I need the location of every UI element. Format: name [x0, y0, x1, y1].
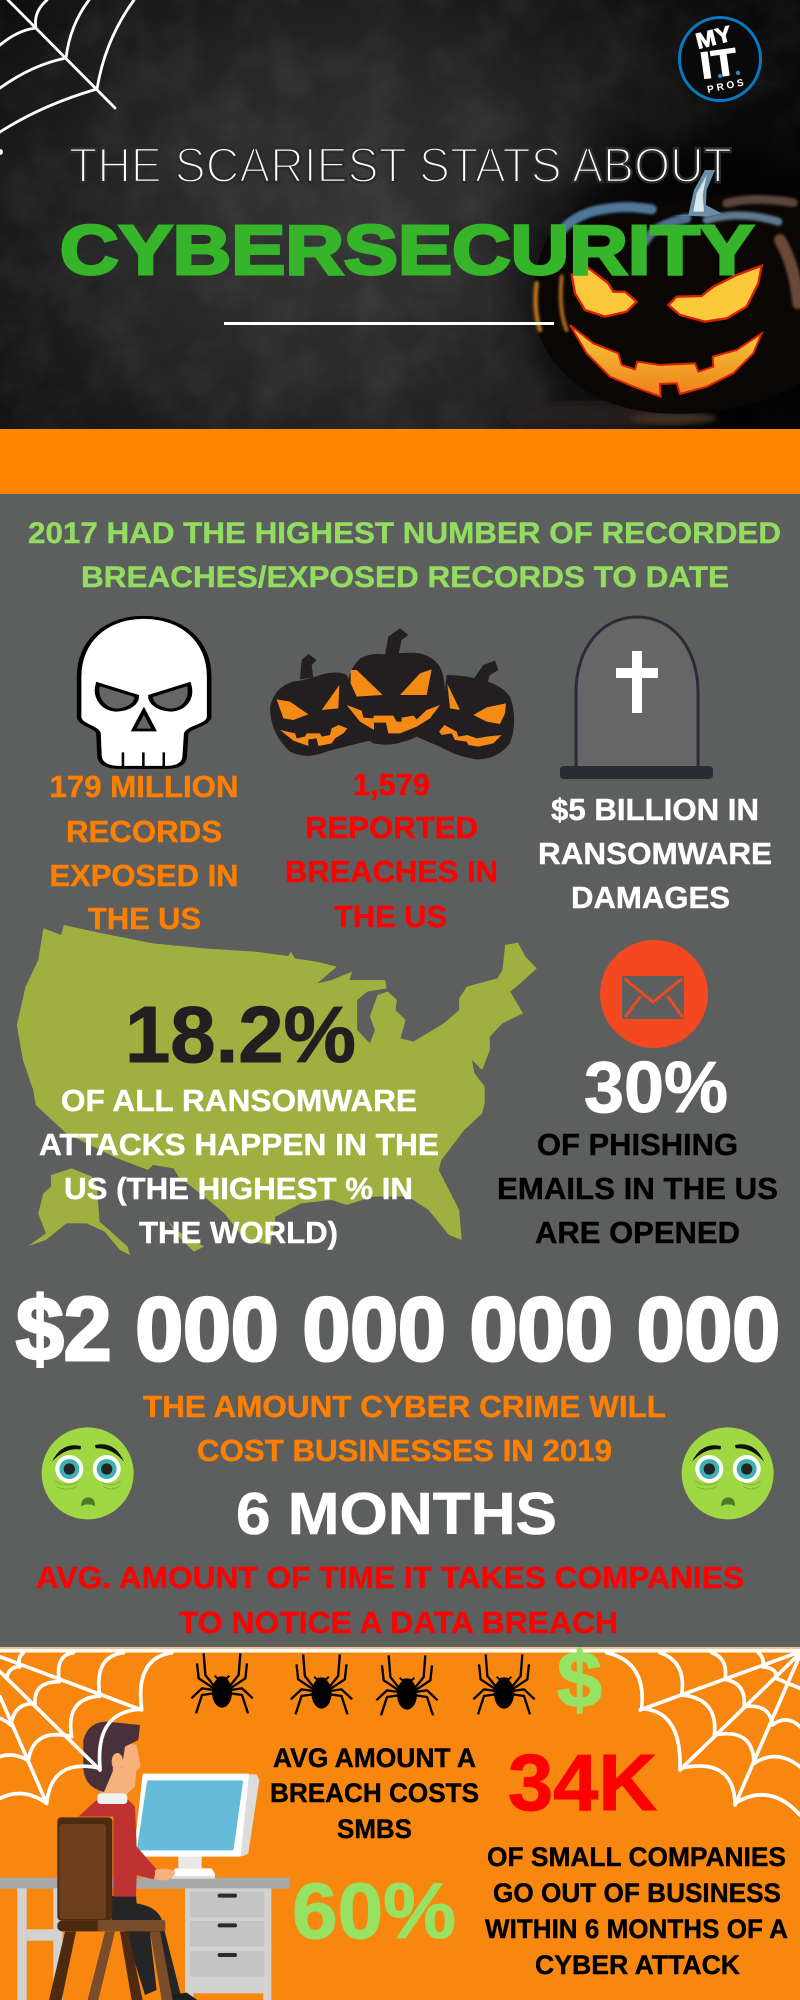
stat: 179 million records [50, 769, 238, 936]
heading: 2017 highest number of breaches [28, 517, 781, 594]
stat: 1,579 reported breaches: BREACHES IN [285, 854, 498, 889]
heading: the scariest stats about: THE SCARIEST STATS ABOUT [69, 139, 732, 193]
stat: 179 million records: EXPOSED IN [50, 858, 238, 893]
map: United States silhouette [17, 925, 537, 1255]
text: small companies go out of business: OF SMALL COMPANIES [487, 1842, 786, 1872]
icon: three black pumpkins [270, 628, 514, 759]
panel: orange bottom section [0, 1647, 800, 2000]
text: small companies go out of business: WITHIN 6 MONTHS OF A [485, 1914, 788, 1944]
man [78, 1722, 197, 2000]
gray body background [0, 494, 800, 1648]
stat: 5 billion ransomware damages: $5 BILLION IN [551, 792, 759, 827]
text: of all ransomware attacks [39, 1083, 439, 1250]
icon: envelope in red circle [600, 940, 708, 1048]
panel: dark header background [0, 0, 800, 460]
text: average amount a breach costs SMBs: AVG AMOUNT A [273, 1743, 476, 1773]
desk [0, 1878, 289, 2000]
text: amount cyber crime will cost: THE AMOUNT CYBER CRIME WILL [143, 1389, 666, 1424]
text: small companies go out of business [485, 1842, 788, 1980]
text: of phishing emails opened: ARE OPENED [535, 1215, 740, 1250]
text: time to notice a breach: TO NOTICE A DATA BREACH [179, 1605, 618, 1640]
stat: 6 months: 6 MONTHS [236, 1481, 557, 1547]
icon: My IT Pros logo: PROS [706, 77, 745, 96]
icon: spider 3 [376, 1655, 438, 1715]
text: of all ransomware attacks: US (THE HIGHEST % IN [64, 1171, 413, 1206]
text: of phishing emails opened: EMAILS IN THE US [497, 1171, 778, 1206]
text: of all ransomware attacks: ATTACKS HAPPEN IN THE [39, 1127, 439, 1162]
stat: 1,579 reported breaches [285, 767, 498, 934]
stat: 2 trillion dollars: $2 000 000 000 000 [16, 1280, 780, 1380]
text: average amount a breach costs SMBs [270, 1743, 479, 1844]
text: of all ransomware attacks: THE WORLD) [139, 1215, 338, 1250]
icon: scared green face left [42, 1427, 134, 1519]
icon: skull [79, 617, 209, 767]
stat: 1,579 reported breaches: REPORTED [305, 810, 478, 845]
icon: glowing jack-o-lantern [533, 170, 800, 424]
stat: 1,579 reported breaches: THE US [334, 899, 447, 934]
icon: tombstone [560, 617, 713, 779]
heading: 2017 highest number of breaches: 2017 HAD THE HIGHEST NUMBER OF RECORDED [28, 517, 781, 550]
stat: 179 million records: 179 MILLION [50, 769, 238, 804]
heading: cybersecurity: CYBERSECURITY [60, 211, 754, 289]
text: of phishing emails opened: OF PHISHING [537, 1127, 738, 1162]
stat: 30 percent: 30% [584, 1048, 728, 1128]
text: time to notice a breach [36, 1560, 744, 1640]
stat: 5 billion ransomware damages: DAMAGES [571, 880, 730, 915]
icon: spider 4 [473, 1654, 535, 1714]
icon: spider web bottom right [607, 1652, 800, 1815]
icon: My IT Pros logo: IT [697, 41, 740, 88]
icon: green dollar sign: $ [557, 1635, 602, 1724]
stat: 1,579 reported breaches: 1,579 [353, 767, 430, 802]
chair [49, 1817, 173, 2000]
icon: spider 1 [191, 1653, 253, 1713]
icon: corner spider web in header [0, 0, 134, 154]
icon: spider web bottom left [0, 1653, 172, 1803]
orange band [0, 429, 800, 494]
text: amount cyber crime will cost: COST BUSINESSES IN 2019 [197, 1433, 612, 1468]
icon: scared green face right [682, 1427, 774, 1519]
text: small companies go out of business: GO OUT OF BUSINESS [493, 1878, 781, 1908]
stat: 179 million records: THE US [88, 901, 201, 936]
heading: 2017 highest number of breaches: BREACHES/EXPOSED RECORDS TO DATE [81, 561, 729, 594]
icon: spider 2 [291, 1654, 352, 1714]
stat: 60 percent: 60% [292, 1866, 456, 1955]
stat: 179 million records: RECORDS [66, 814, 222, 849]
illustration: person at computer desk [0, 1722, 289, 2000]
text: time to notice a breach: AVG. AMOUNT OF TIME IT TAKES COMPANIES [36, 1560, 744, 1595]
stat: 34K: 34K [508, 1738, 657, 1827]
text: amount cyber crime will cost [143, 1389, 666, 1468]
title underline [224, 322, 554, 325]
stat: 5 billion ransomware damages: RANSOMWARE [538, 836, 772, 871]
text: of phishing emails opened [497, 1127, 778, 1250]
text: average amount a breach costs SMBs: SMBS [337, 1814, 412, 1844]
text: small companies go out of business: CYBER ATTACK [535, 1950, 740, 1980]
stat: 5 billion ransomware damages [538, 792, 772, 915]
icon: My IT Pros logo: MY [693, 21, 734, 54]
stat: 18.2 percent number: 18.2% [125, 990, 356, 1079]
text: average amount a breach costs SMBs: BREACH COSTS [270, 1778, 479, 1808]
computer monitor [135, 1774, 259, 1879]
text: of all ransomware attacks: OF ALL RANSOMWARE [61, 1083, 417, 1118]
icon: My IT Pros logo [680, 18, 760, 100]
